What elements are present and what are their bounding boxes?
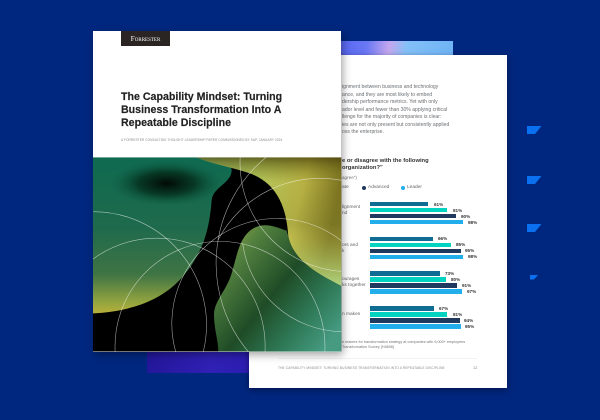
title: Business Transformation Into A (121, 104, 281, 116)
icon: blue marker 2 (527, 176, 542, 184)
row labels (342, 204, 366, 317)
cover artwork (93, 157, 342, 352)
row labels: lignment (342, 205, 360, 210)
text block: back page intro: oss the enterprise. (342, 129, 384, 135)
bar chart: 95% (465, 324, 474, 329)
panel: front cover (93, 31, 341, 352)
footnote: Transformation Survey [H4696] (342, 345, 394, 349)
bar chart: 91% (462, 283, 471, 288)
panel: back page (249, 55, 507, 388)
row labels: k (342, 249, 344, 254)
heading: chart question: organization?" (342, 165, 383, 171)
title: Repeatable Discipline (121, 117, 231, 129)
bar chart: 66% (438, 236, 447, 241)
row labels: n makes (342, 312, 360, 317)
title (121, 91, 282, 129)
bar chart: 90% (461, 214, 470, 218)
bar chart: 81% (453, 208, 462, 212)
text block: back page intro: ignment between business and technology (342, 84, 438, 90)
text: chart subtitle: agree") (342, 175, 357, 180)
bar chart: 81% (453, 312, 462, 317)
row labels: nd (342, 211, 347, 216)
logo: Forrester: Forrester (131, 34, 160, 43)
bar chart: 98% (468, 220, 477, 224)
subtitle: A FORRESTER CONSULTING THOUGHT LEADERSHIP PAPER COMMISSIONED BY SAP, JANUARY 2024 (121, 138, 282, 142)
legend (342, 184, 422, 190)
bar chart: 67% (439, 306, 448, 311)
legend: Advanced (368, 185, 389, 190)
legend: ate (342, 185, 349, 190)
row labels: ks together (342, 283, 366, 288)
icon: blue marker 1 (527, 126, 542, 134)
heading: chart question: e or disagree with the following (342, 158, 429, 164)
icon: blue marker 4 (530, 275, 538, 280)
bar chart: 61% (434, 202, 443, 206)
icon: blue marker 3 (527, 224, 542, 232)
text block: back page intro: llenge for the majority of companies is clear: (342, 114, 441, 120)
bar chart: 95% (465, 248, 474, 253)
legend: Leader (407, 185, 422, 190)
footer: running title: THE CAPABILITY MINDSET: TURNING BUSINESS TRANSFORMATION INTO A REPEATABLE DISCIPLINE (278, 366, 445, 370)
bar chart: 80% (451, 277, 460, 282)
row labels: ors and (342, 243, 358, 248)
logo: Forrester (121, 31, 170, 46)
purple strip: bottom (147, 345, 252, 373)
text block: back page intro: ies are not only present but consistently applied (342, 122, 449, 128)
footer: running title: 12 (473, 364, 477, 370)
text block: back page intro: dership performance metrics. Yet with only (342, 99, 438, 105)
bar chart: 94% (464, 318, 473, 323)
bar chart: 97% (467, 289, 476, 294)
bar chart: 98% (468, 254, 477, 259)
footnote: e makers for transformation strategy at companies with 5,000+ employees (342, 340, 465, 344)
heading: chart question (342, 158, 429, 171)
text block: back page intro: ador level and fewer than 30% applying critical (342, 106, 447, 112)
text block: back page intro (342, 84, 449, 135)
footer: running title (278, 364, 478, 370)
bar chart: 73% (445, 271, 454, 276)
text block: back page intro: ance, and they are most likely to embed (342, 92, 432, 98)
row labels: ourages (342, 277, 359, 282)
title: The Capability Mindset: Turning (121, 91, 282, 103)
bar chart: 85% (456, 242, 465, 247)
purple strip: top (330, 41, 453, 56)
footnote (342, 340, 465, 349)
